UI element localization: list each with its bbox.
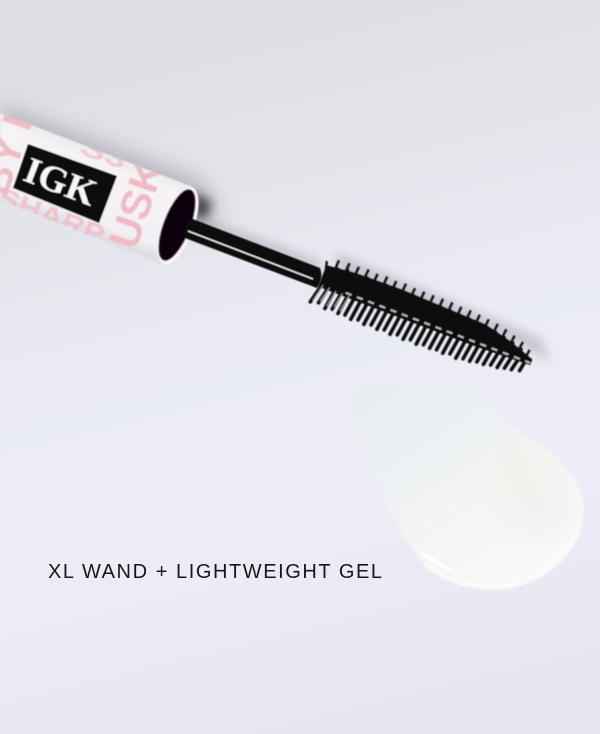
gel highlight: [419, 551, 458, 573]
pink tube lettering: S3: [76, 130, 131, 175]
mascara tube: [0, 113, 200, 264]
cast shadows: [0, 104, 550, 362]
wand stem: [185, 218, 321, 288]
pink tube lettering: [0, 114, 160, 247]
brush core: [318, 261, 539, 367]
IGK logo box: [13, 144, 117, 223]
gel warm inner tone: [493, 440, 572, 540]
grey glints on first bristles: [313, 284, 349, 312]
pink tube lettering: USK: [99, 154, 173, 254]
gel swatch: [352, 382, 584, 590]
tube rim: [149, 182, 207, 270]
mascara brush: [310, 254, 542, 385]
IGK logo text: IGK: [18, 150, 102, 215]
silver coil: [346, 293, 530, 363]
stem highlight: [188, 231, 313, 279]
gel bottom rim: [425, 535, 575, 586]
upper bristles: [320, 255, 536, 358]
caption: XL WAND + LIGHTWEIGHT GEL: [48, 561, 382, 583]
lower bristles: [310, 282, 525, 383]
tube body: [0, 113, 193, 265]
tube opening: [151, 185, 203, 265]
